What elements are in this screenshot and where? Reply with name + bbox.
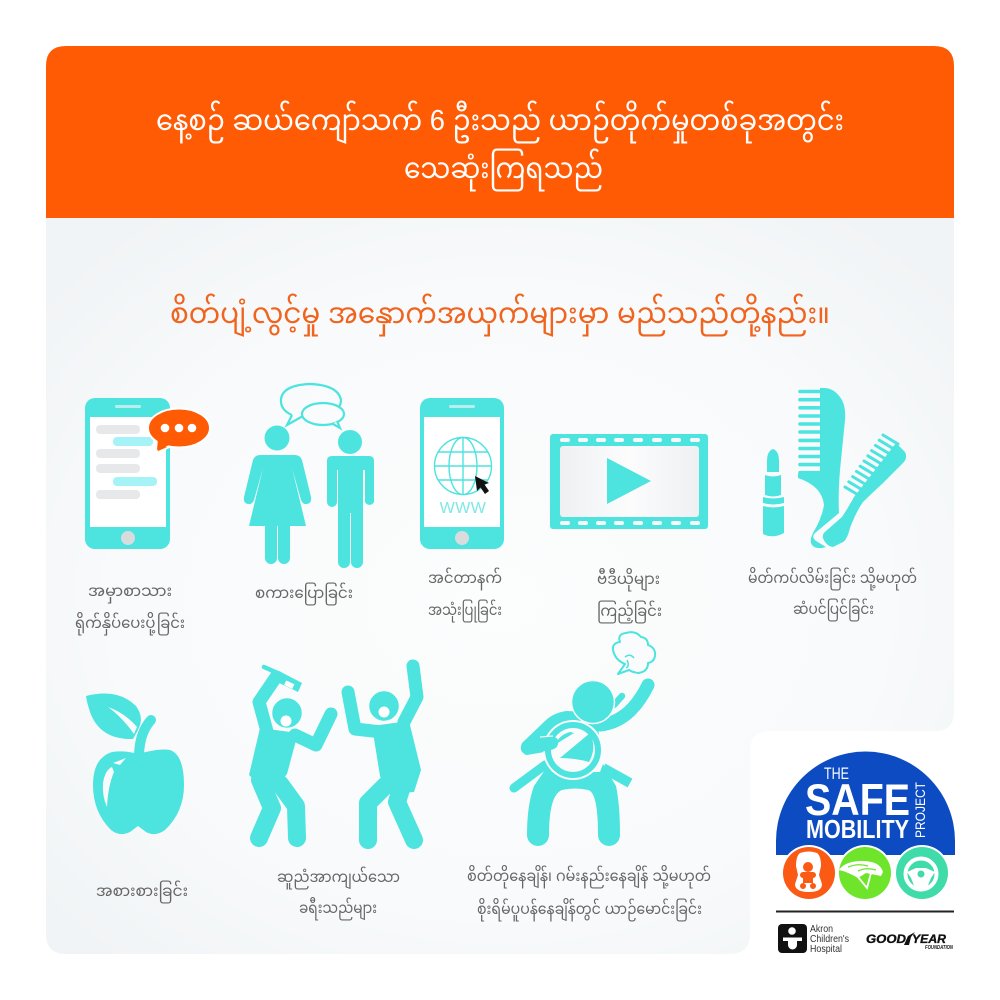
icon: noisy passengers (249, 666, 421, 840)
label: makeup or hair: ဆံပင်ပြင်ခြင်း (793, 599, 874, 621)
logo: The Safe Mobility Project: MOBILITY (806, 814, 909, 844)
logo: Goodyear Foundation (866, 932, 953, 951)
icon: lipstick and combs (763, 388, 906, 548)
label: noisy passengers (277, 867, 400, 920)
label: using internet: အင်တာနက် (428, 568, 502, 590)
panel: orange header (46, 46, 954, 218)
title: နေ့စဉ် ဆယ်ကျော်သက် 6 ဦးသည် ယာဉ်တိုက်မှုတစ်ခုအတွင်း (156, 101, 844, 144)
label: makeup or hair: မိတ်ကပ်လိမ်းခြင်း သို့မဟုတ် (748, 568, 917, 590)
icon: child car seat (781, 845, 837, 901)
logo: The Safe Mobility Project: THE (824, 765, 849, 783)
label: texting: ရိုက်နှိပ်ပေးပို့ခြင်း (75, 613, 185, 635)
label: texting (75, 583, 185, 635)
logo: The Safe Mobility Project: SAFE (805, 776, 910, 825)
label: noisy passengers: ဆူညံအာကျယ်သော (277, 867, 400, 889)
logo: Goodyear Foundation: FOUNDATION (925, 945, 953, 951)
label: using internet: အသုံးပြုခြင်း (428, 600, 502, 622)
label: talking: စကားပြောခြင်း (255, 583, 353, 605)
icon: angry driver (514, 632, 655, 846)
title: သေဆုံးကြရသည် (404, 149, 603, 192)
heading: distraction question: စိတ်ပျံ့လွင့်မှု အနှောက်အယှက်များမှာ မည်သည်တို့နည်း။ (170, 294, 830, 337)
icon: apple (86, 694, 184, 834)
icon: phone with internet globe: WWW (440, 500, 487, 517)
label: makeup or hair (748, 568, 917, 621)
logo: The Safe Mobility Project (776, 751, 955, 955)
icon: steering wheel (894, 845, 950, 901)
label: watching videos: ကြည့်ခြင်း (597, 601, 662, 623)
icon: two people talking (244, 384, 374, 568)
icon: video film strip (550, 434, 708, 529)
label: noisy passengers: ခရီးသည်များ (299, 898, 377, 920)
label: eating: အစားစားခြင်း (96, 881, 188, 903)
logo: Goodyear Foundation: YEAR (912, 932, 946, 946)
logo: Goodyear Foundation: GOOD (866, 932, 906, 946)
label: watching videos: ဗီဒီယိုများ (597, 569, 660, 591)
label: emotional driving: စိုးရိမ်ပူပန်နေချိန်တွင် ယာဉ်မောင်းခြင်း (477, 899, 702, 921)
label: emotional driving: စိတ်တိုနေချိန်၊ ဂမ်းနည်းနေချိန် သို့မဟုတ် (467, 866, 711, 888)
icon: phone with internet globe (420, 398, 504, 549)
title (156, 101, 844, 192)
logo: The Safe Mobility Project: PROJECT (912, 782, 928, 838)
panel: background card (46, 218, 954, 954)
icon: phone with text messages (85, 398, 210, 549)
icon: bike helmet (837, 845, 893, 901)
logo: Akron Children's Hospital: Akron (810, 924, 833, 935)
logo: Akron Children's Hospital (778, 924, 849, 955)
label: texting: အမှာစာသား (88, 583, 172, 603)
label: watching videos (597, 569, 662, 623)
label: emotional driving (467, 866, 711, 921)
logo: Akron Children's Hospital: Children's (810, 934, 849, 945)
logo: Akron Children's Hospital: Hospital (810, 944, 842, 955)
label: using internet (428, 568, 502, 622)
